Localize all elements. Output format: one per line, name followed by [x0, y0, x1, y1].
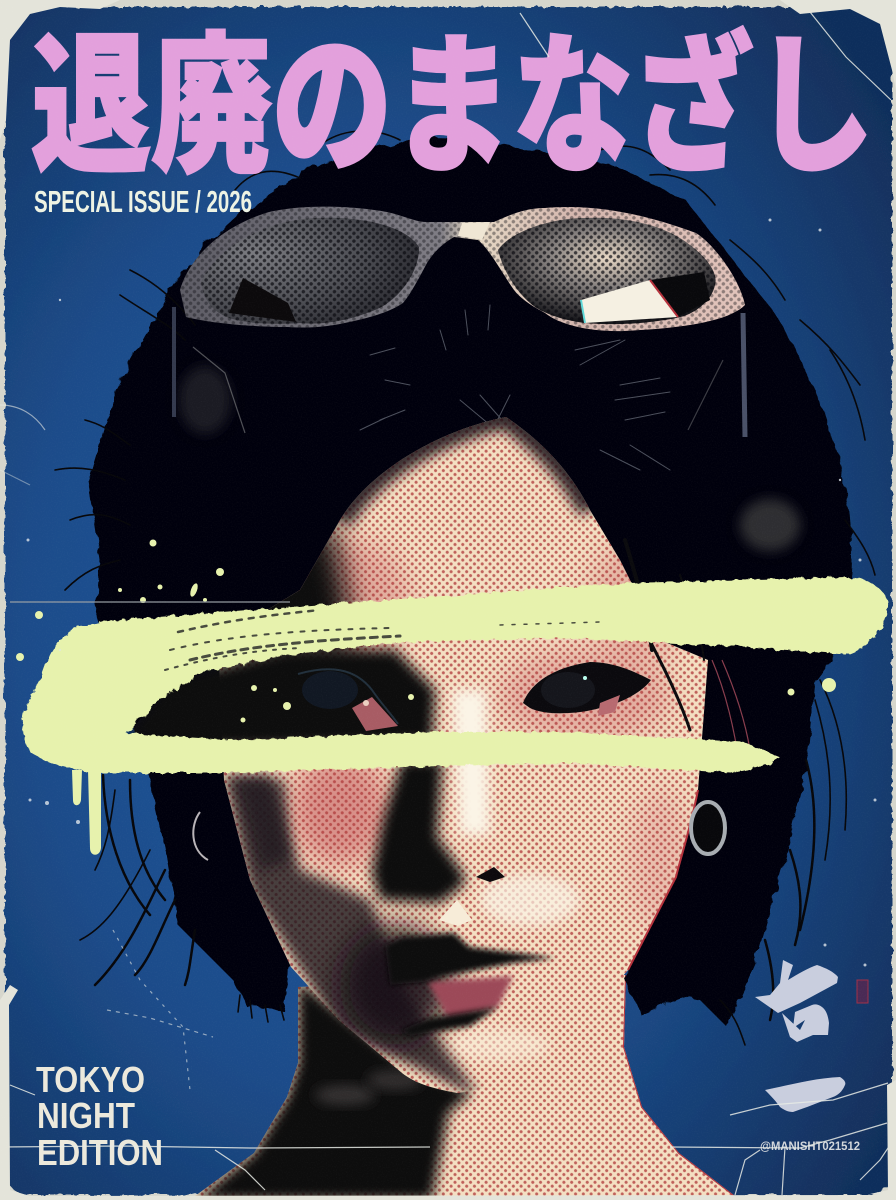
- fold crease: [10, 601, 290, 603]
- forehead left shade: [210, 520, 352, 660]
- eye smudge: [126, 650, 435, 748]
- right lens: [498, 218, 716, 324]
- frame: [180, 207, 745, 331]
- left lens: [201, 218, 419, 324]
- face rim: [628, 790, 698, 970]
- hair strands: [55, 131, 875, 1045]
- lips: [385, 933, 555, 1036]
- spray paint stroke: [23, 577, 888, 773]
- hair smudges: [179, 366, 800, 551]
- nostril: [476, 867, 505, 882]
- sunglasses: [174, 207, 745, 437]
- edition text: TOKYO: [36, 1059, 145, 1100]
- philtrum highlight: [439, 900, 472, 926]
- right eye: [523, 662, 651, 716]
- eyes: [298, 662, 651, 731]
- fringe strands: [625, 540, 704, 730]
- hair: [88, 137, 852, 1027]
- hairline shade: [340, 417, 590, 520]
- edition text: EDITION: [37, 1132, 163, 1173]
- rosy tones: [500, 650, 670, 740]
- nose highlight: [452, 690, 490, 835]
- bridge highlight: [458, 222, 490, 240]
- red seal: [857, 980, 868, 1003]
- subtitle: SPECIAL ISSUE / 2026: [34, 184, 252, 219]
- edition text: [36, 1059, 163, 1173]
- left eye: [298, 669, 398, 731]
- hair highlights: [360, 305, 670, 470]
- jaw shadow: [224, 775, 480, 1098]
- watermark: @MANISHT021512: [760, 1139, 860, 1153]
- calligraphy mark: [755, 960, 845, 1112]
- title: 退廃のまなざし: [31, 22, 874, 191]
- earrings: [193, 802, 725, 860]
- background specks: [26, 218, 876, 966]
- edition text: NIGHT: [37, 1095, 135, 1136]
- spray dry-brush streaks: [165, 610, 600, 670]
- face: [200, 410, 720, 1100]
- spray drips and splatter: [16, 540, 836, 855]
- nose shadow: [372, 760, 465, 903]
- neck: [190, 970, 740, 1200]
- side hair strand highlights: [712, 660, 750, 770]
